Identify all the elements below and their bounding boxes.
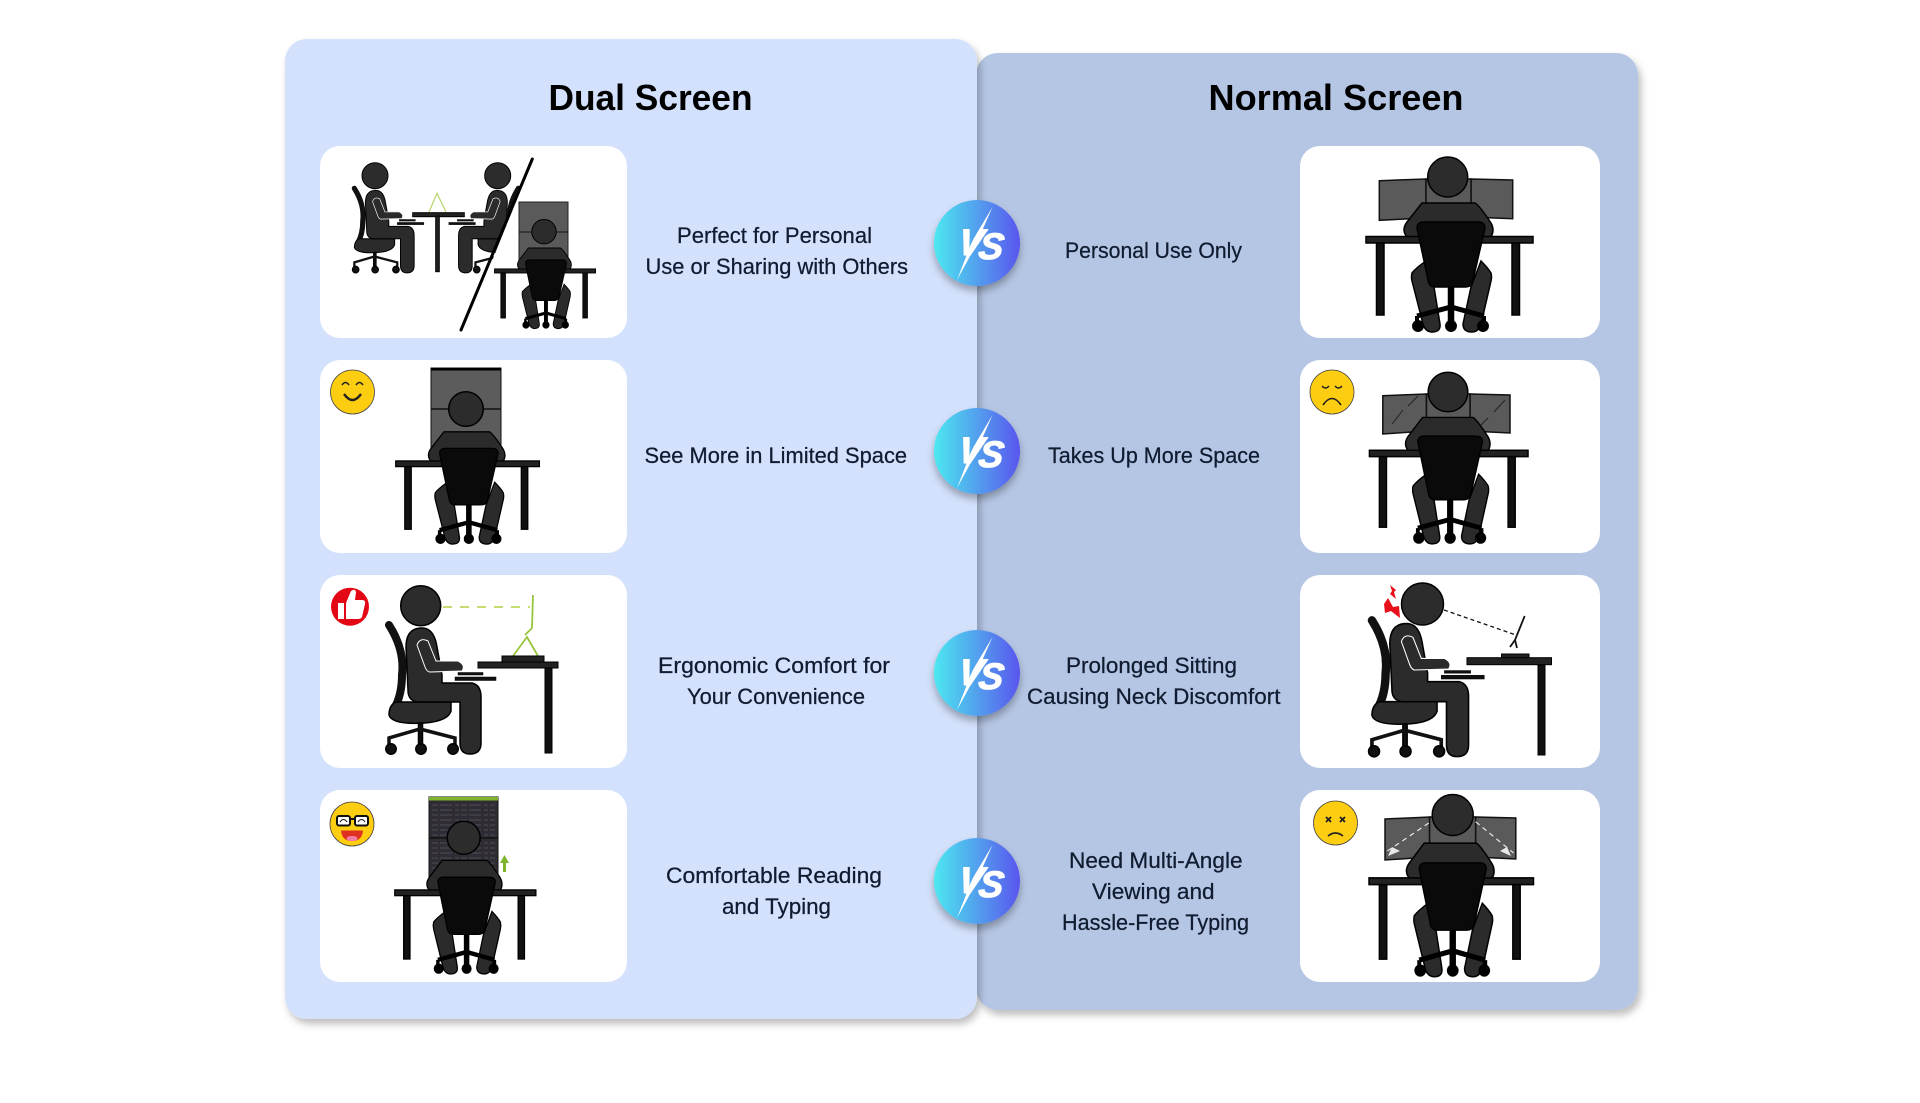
vs badge row 2 — [934, 408, 1020, 494]
illustration: two people facing at shared table — [352, 159, 610, 336]
vs badge row 4: S — [976, 863, 1007, 905]
icon: smiling face — [330, 370, 374, 414]
comparison text row 3 right: Prolonged Sitting — [1066, 653, 1237, 678]
icon: laughing face with glasses — [330, 802, 374, 846]
illustration: side view at eye level monitor — [386, 586, 558, 754]
illustration: viewer turning head across angled monitors — [1369, 794, 1534, 977]
comparison text row 4 left — [666, 863, 882, 919]
vs badge row 1: V — [956, 221, 986, 263]
card 2 right: takes up more space — [1300, 360, 1600, 553]
card 3 left: ergonomic comfort — [320, 575, 627, 768]
panel: normal screen — [976, 53, 1638, 1010]
illustration: side view looking down at low monitor — [1369, 583, 1552, 757]
comparison text row 4 right: Need Multi-Angle — [1069, 848, 1243, 873]
comparison text row 3 right: Causing Neck Discomfort — [1027, 684, 1281, 709]
comparison text row 4 right: Viewing and — [1092, 879, 1215, 904]
vs badge row 4: V — [956, 859, 986, 901]
icon: sad face — [1310, 370, 1354, 414]
vs badge row 3: S — [976, 655, 1007, 697]
vs badge row 1 — [934, 200, 1020, 286]
comparison text row 3 left: Ergonomic Comfort for — [658, 653, 891, 678]
illustration: single viewer at tall monitor — [495, 202, 596, 329]
comparison text row 4 right: Hassle-Free Typing — [1062, 910, 1249, 935]
comparison text row 2 right: Takes Up More Space — [1048, 443, 1260, 468]
comparison text row 1 left — [646, 223, 908, 279]
comparison text row 3 left: Your Convenience — [687, 684, 865, 709]
card 4 right: multi-angle viewing — [1300, 790, 1600, 982]
comparison text row 1 left: Use or Sharing with Others — [646, 254, 908, 279]
comparison text row 1 right: Personal Use Only — [1065, 238, 1243, 263]
heading: normal screen: Normal Screen — [1208, 77, 1464, 118]
illustration: viewer at tall code monitor with arrow — [395, 797, 536, 974]
vs badge row 2: V — [956, 429, 986, 471]
icon: red pain bolts — [1384, 585, 1400, 618]
illustration: viewer with three monitors — [1366, 157, 1533, 332]
comparison text row 4 left: Comfortable Reading — [666, 863, 882, 888]
icon: dizzy face — [1314, 801, 1358, 845]
heading: dual screen: Dual Screen — [548, 77, 752, 118]
illustration: viewer at tall monitor — [396, 368, 539, 544]
vs badge row 3: V — [956, 651, 986, 693]
comparison text row 1 left: Perfect for Personal — [677, 223, 872, 248]
illustration: viewer with three monitors and glare — [1369, 372, 1528, 544]
vs badge row 3 — [934, 630, 1020, 716]
vs badge row 1: S — [976, 225, 1007, 267]
card 2 left: see more in limited space — [320, 360, 627, 553]
card 3 right: neck discomfort — [1300, 575, 1600, 768]
vs badge row 2: S — [976, 433, 1007, 475]
card 1 left: personal or sharing — [320, 146, 627, 338]
card 4 left: comfortable reading and typing — [320, 790, 627, 982]
comparison text row 4 right — [1062, 848, 1249, 935]
vs badge row 4 — [934, 838, 1020, 924]
icon: thumbs up — [331, 588, 369, 626]
card 1 right: personal use only — [1300, 146, 1600, 338]
comparison text row 4 left: and Typing — [722, 894, 831, 919]
comparison text row 3 left — [658, 653, 891, 709]
comparison text row 3 right — [1027, 653, 1281, 709]
comparison text row 2 left: See More in Limited Space — [645, 443, 907, 468]
